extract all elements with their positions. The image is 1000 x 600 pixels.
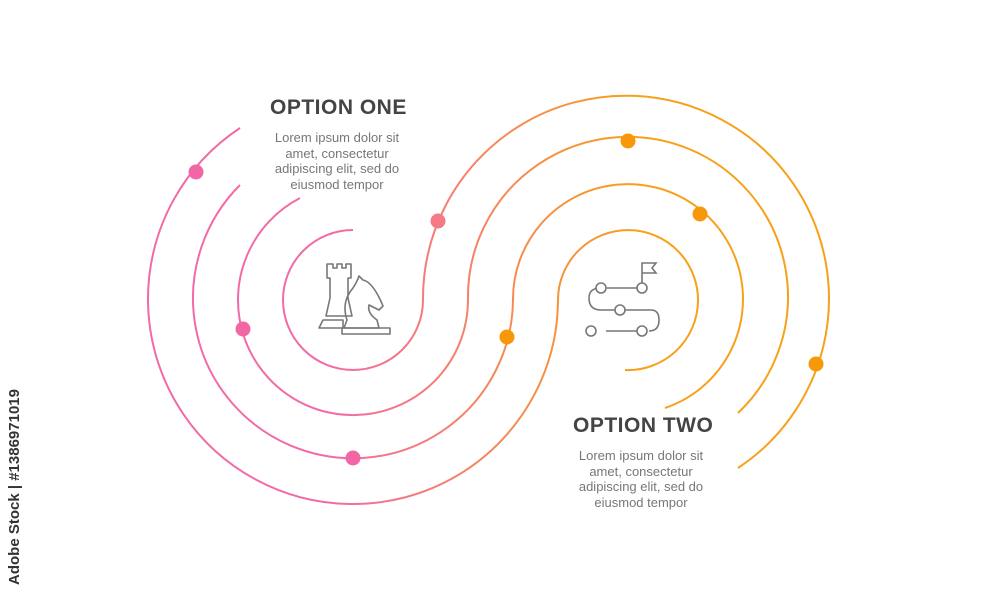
icon: chess pieces: [319, 264, 390, 334]
text: option one body: Lorem ipsum dolor sit amet, consectetur adipiscing elit, sed do eiusmod tempor: [275, 130, 399, 192]
side label: Adobe Stock | #1386971019: [6, 389, 23, 585]
title: option one: OPTION ONE: [270, 96, 407, 119]
dots: [188, 134, 824, 466]
text: option two body: Lorem ipsum dolor sit amet, consectetur adipiscing elit, sed do eiusmod tempor: [579, 448, 703, 510]
icon: route with flag: [586, 263, 659, 336]
title: option two: OPTION TWO: [573, 414, 713, 437]
